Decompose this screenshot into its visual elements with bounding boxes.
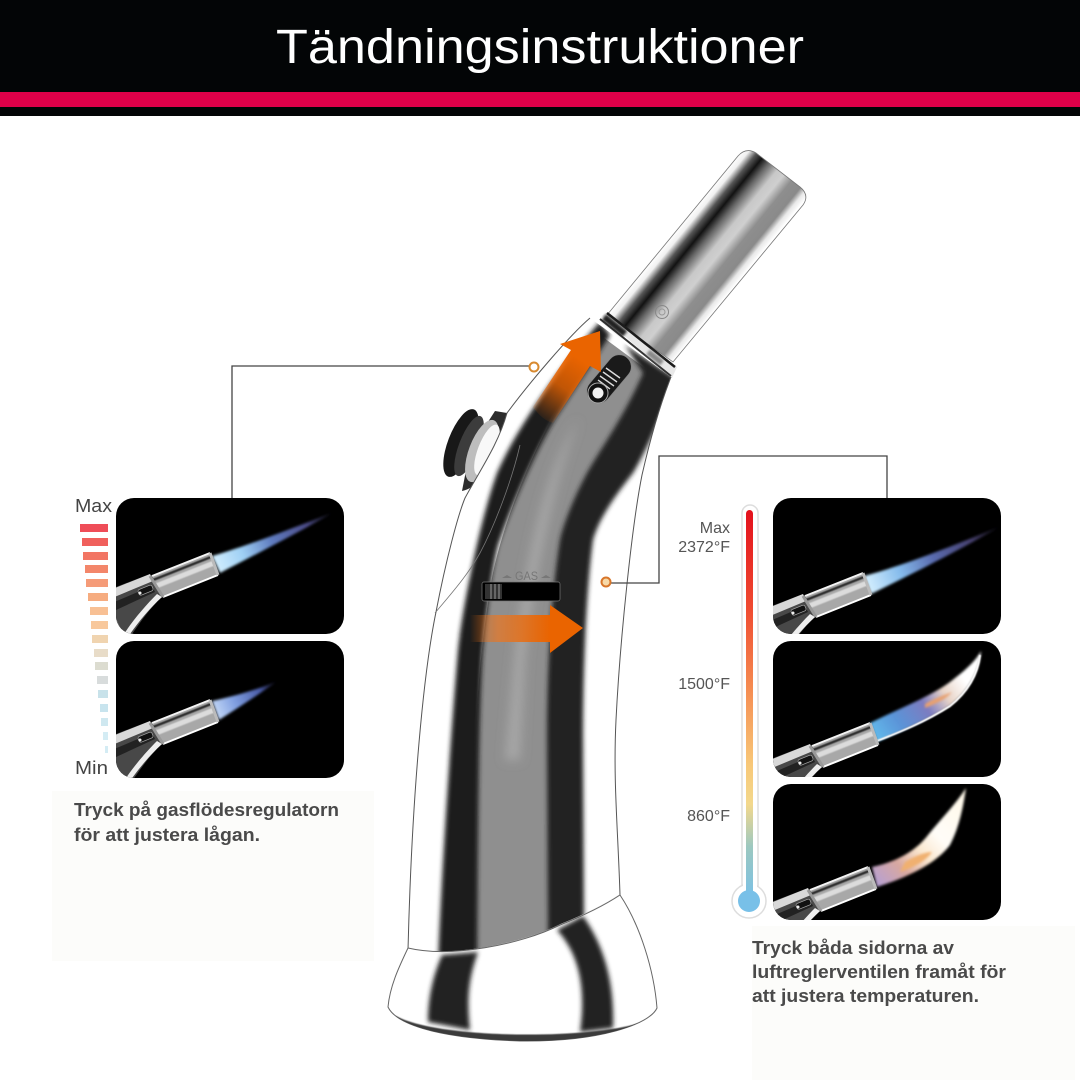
caption: air valve: luftreglerventilen framåt för xyxy=(752,962,1006,982)
torch head xyxy=(773,722,880,777)
flame panel: max gas xyxy=(116,498,344,634)
right dark stripe xyxy=(547,345,675,935)
torch head xyxy=(773,866,878,920)
central gray panel xyxy=(470,335,650,965)
title: Tändningsinstruktioner xyxy=(276,21,804,74)
temperature labels: Max xyxy=(700,520,730,537)
flame panel: medium temperature xyxy=(773,641,1001,777)
flame panel: min gas xyxy=(116,641,344,778)
torch head xyxy=(116,699,220,778)
flame scale: max to min: Max xyxy=(75,496,112,516)
yellow flame xyxy=(872,788,966,887)
light seam xyxy=(462,894,620,950)
mixed flame xyxy=(870,651,981,742)
connector line: air valve xyxy=(602,456,887,586)
torch collar ring xyxy=(600,312,677,378)
torch head xyxy=(116,552,220,634)
flame scale: max to min: Min xyxy=(75,758,108,778)
torch base xyxy=(388,895,657,1044)
torch head xyxy=(773,572,872,634)
air valve slider xyxy=(582,350,636,408)
blue flame xyxy=(212,682,276,720)
caption: gas regulator xyxy=(74,800,339,845)
orange arrow: air valve xyxy=(533,331,601,423)
torch side knob xyxy=(436,405,509,491)
temperature thermometer: 2372°F xyxy=(678,539,730,556)
temperature thermometer: 1500°F xyxy=(678,676,730,693)
temperature thermometer: 860°F xyxy=(687,808,730,825)
flame scale: max to min xyxy=(75,496,112,778)
caption background: right xyxy=(752,926,1075,1080)
left dark stripe xyxy=(438,322,610,965)
caption background: left xyxy=(52,791,374,961)
header bar xyxy=(0,0,1080,116)
caption: gas regulator: för att justera lågan. xyxy=(74,825,260,845)
gas slider xyxy=(482,569,560,601)
flame panel: max temperature xyxy=(773,498,1001,634)
blue flame xyxy=(212,513,332,573)
blue flame xyxy=(864,527,999,594)
gas slider: GAS xyxy=(515,569,538,583)
connector line: gas regulator xyxy=(232,362,538,498)
caption: air valve: att justera temperaturen. xyxy=(752,986,979,1006)
torch illustration xyxy=(388,151,806,1044)
torch body xyxy=(408,318,675,965)
flame panel: low temperature xyxy=(773,784,1001,920)
orange arrow: gas flow xyxy=(470,605,583,653)
caption: air valve: Tryck båda sidorna av xyxy=(752,938,954,958)
temperature thermometer xyxy=(678,505,766,918)
caption: air valve xyxy=(752,938,1006,1006)
torch nozzle xyxy=(607,151,806,362)
caption: gas regulator: Tryck på gasflödesregulatorn xyxy=(74,800,339,820)
